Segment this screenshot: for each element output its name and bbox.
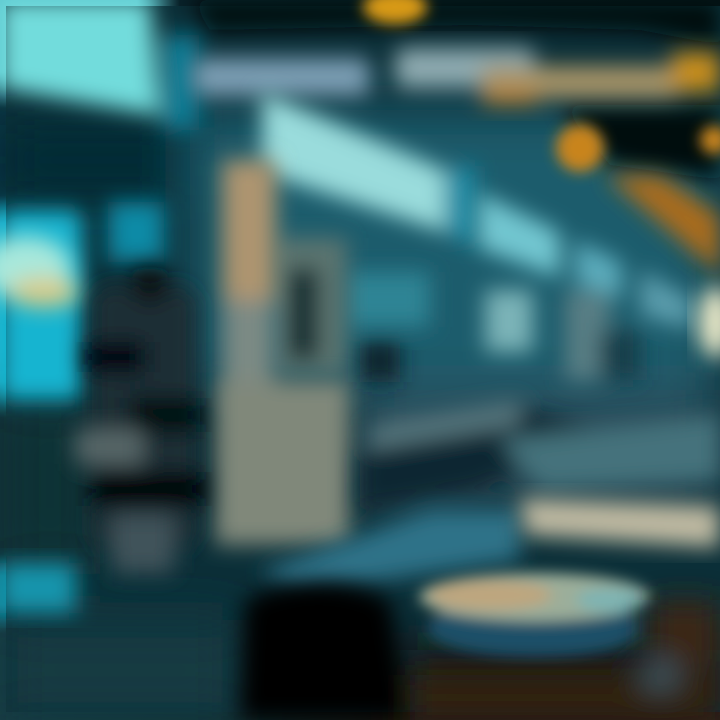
- top-left cyan panel: [0, 0, 199, 130]
- left window highlight: [0, 236, 80, 307]
- bottom-left cyan glow: [0, 563, 76, 613]
- blurred sign text: [192, 48, 720, 104]
- dark standing figure: [75, 267, 204, 573]
- tan column: [215, 160, 350, 545]
- round table: [419, 573, 651, 658]
- grey column with dark core: [275, 238, 347, 373]
- bright right edge: [698, 286, 720, 358]
- central light panel: [262, 92, 475, 245]
- ceiling lamps: [363, 0, 720, 172]
- receding window panels: [345, 192, 692, 382]
- orange ceiling beam: [605, 175, 720, 275]
- left bright window: [0, 202, 164, 400]
- dark ceiling: [190, 0, 720, 180]
- pale right counter stripe: [520, 498, 720, 548]
- dark foreground shape: [240, 582, 410, 720]
- counter and tables: [260, 400, 720, 592]
- warm bottom-right floor: [410, 600, 720, 720]
